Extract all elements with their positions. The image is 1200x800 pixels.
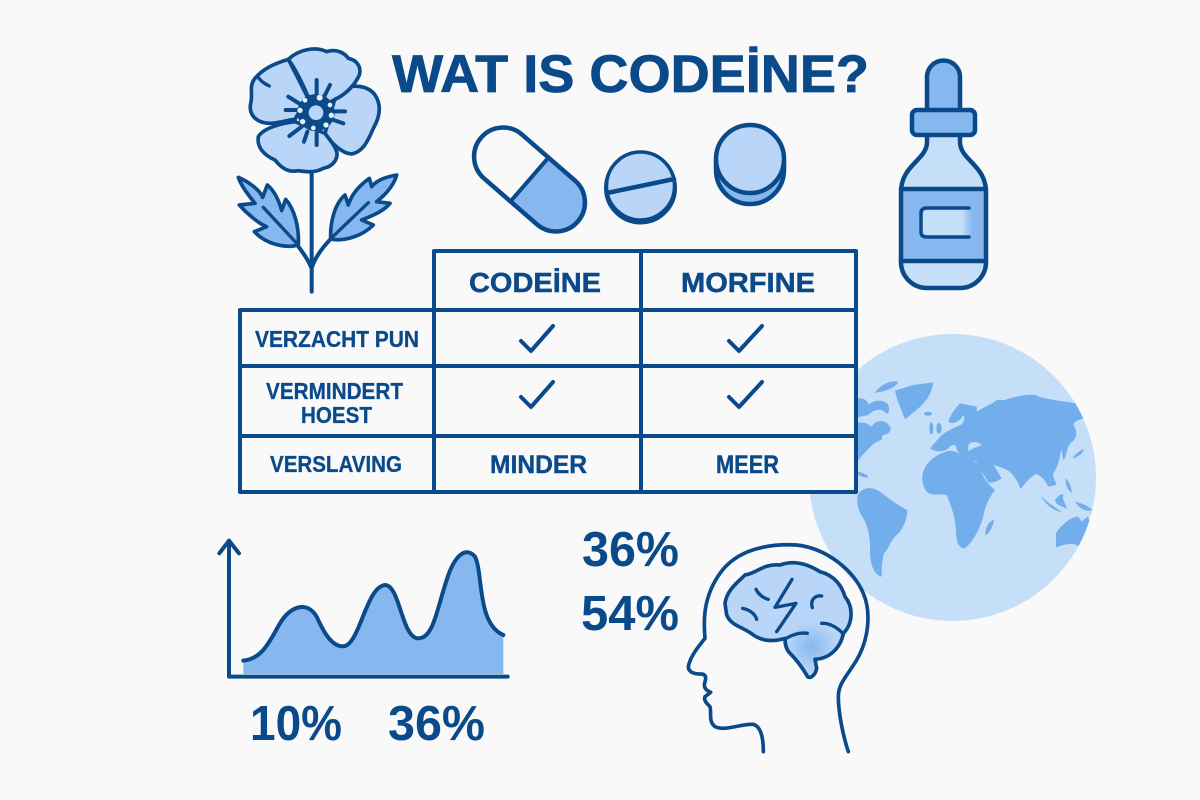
comparison table (240, 251, 856, 492)
table header: codeine: CODEİNE (469, 267, 601, 298)
globe (809, 334, 1096, 621)
row label: vermindert hoest (266, 378, 403, 428)
row label: verzacht pijn: VERZACHT PUN (255, 326, 419, 352)
icon: round pill (716, 125, 784, 204)
icon: dropper bottle (901, 61, 986, 288)
icon: scored tablet (606, 152, 675, 222)
icon: head with brain (688, 545, 868, 752)
check marks (521, 326, 762, 407)
icon: capsule (462, 116, 597, 243)
row label: vermindert hoest: VERMINDERT (266, 378, 403, 404)
stat: 36% under chart: 36% (388, 697, 485, 751)
value: meer: MEER (716, 451, 779, 479)
area chart (219, 541, 508, 677)
row label: verslaving: VERSLAVING (270, 451, 402, 477)
stat: 36%: 36% (582, 523, 679, 577)
value: minder: MINDER (490, 451, 587, 479)
stat: 10%: 10% (250, 697, 342, 751)
title: WAT IS CODEİNE? (392, 45, 869, 104)
stat: 54%: 54% (581, 587, 679, 641)
icon: poppy flower (238, 49, 397, 292)
row label: vermindert hoest: HOEST (301, 402, 372, 428)
table header: morfine: MORFINE (681, 267, 815, 298)
